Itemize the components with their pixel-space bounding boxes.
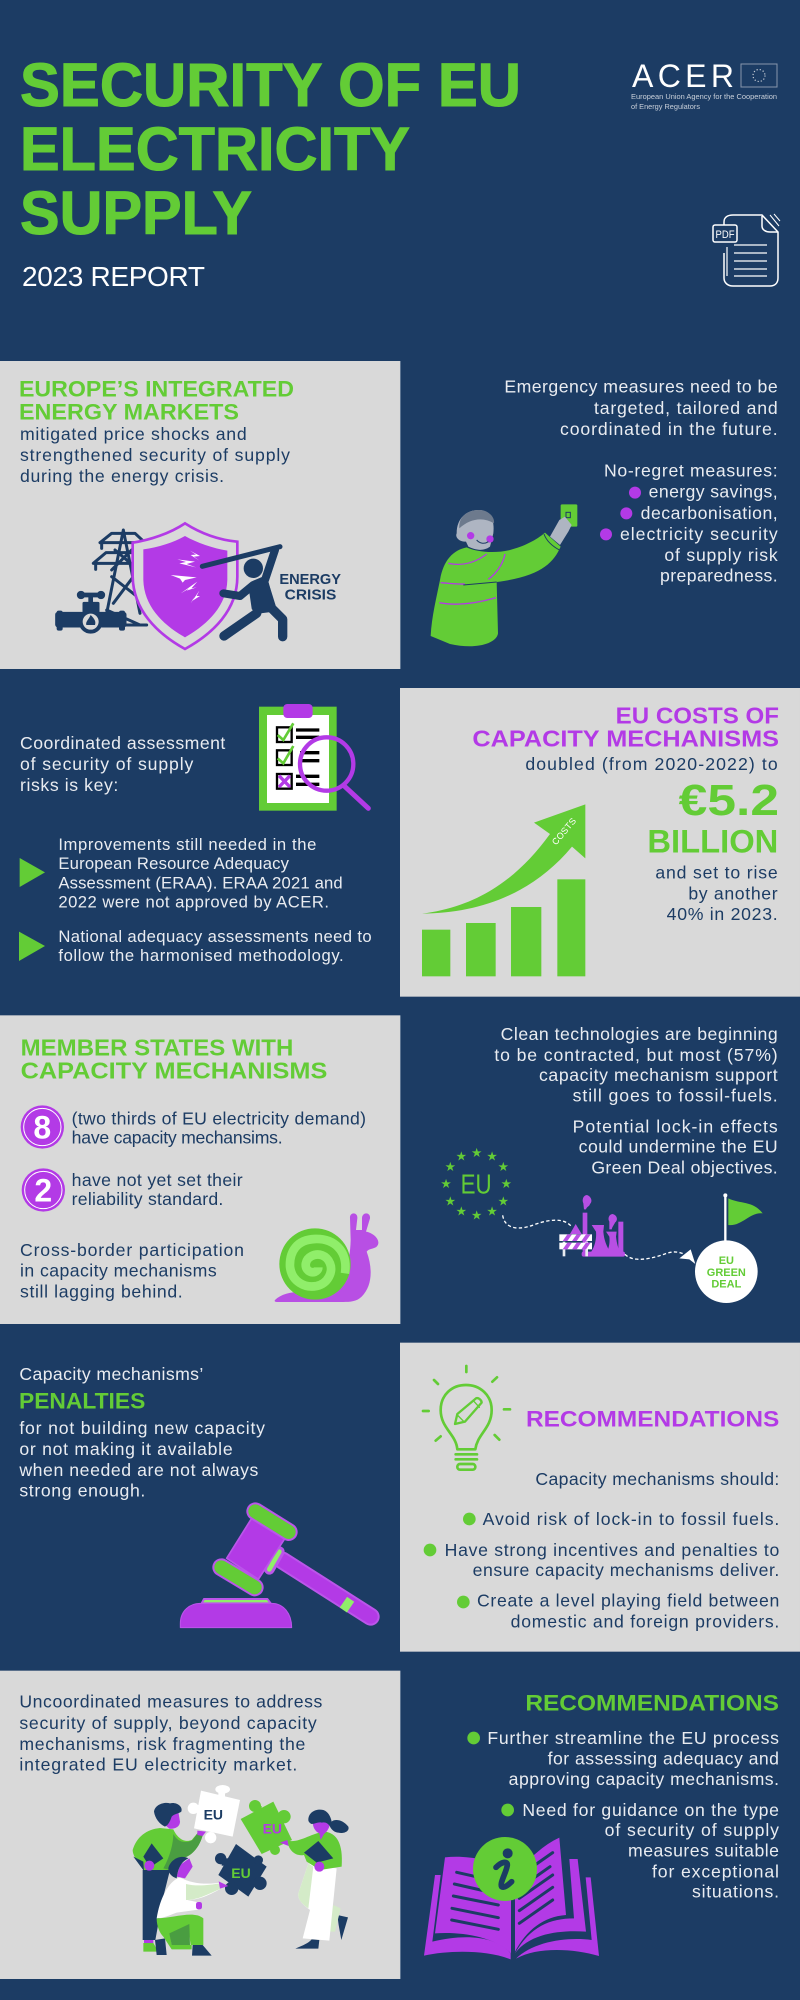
text block: mitigated price shocks and <box>20 424 247 444</box>
text block <box>655 862 778 924</box>
heading: EU COSTS OF <box>616 702 779 728</box>
heading <box>19 377 294 424</box>
text block: clean technologies: to be contracted, but most (57%) <box>494 1045 778 1065</box>
text block: clean technologies: Clean technologies are beginning <box>501 1024 778 1044</box>
text block <box>19 1692 323 1775</box>
list: recommendations: Create a level playing field between <box>477 1591 779 1611</box>
list item: streamline process: approving capacity mechanisms. <box>509 1769 779 1789</box>
heading: CAPACITY MECHANISMS <box>472 726 779 752</box>
text block: mechanisms, risk fragmenting the <box>19 1734 306 1754</box>
icon: EU stars: ★ <box>456 1204 467 1219</box>
panel: recommendations, capacity mechanisms <box>400 1343 800 1652</box>
big number <box>647 776 779 860</box>
title <box>20 51 521 247</box>
text block: cross-border: Cross-border participation <box>20 1240 244 1260</box>
text block: emergency measures <box>504 377 778 439</box>
text block: emergency measures: coordinated in the future. <box>560 419 778 439</box>
text block: when needed are not always <box>18 1460 259 1480</box>
header <box>20 51 780 292</box>
list item: guidance <box>501 1800 779 1901</box>
heading: CAPACITY MECHANISMS <box>21 1058 327 1084</box>
text block <box>20 424 290 486</box>
text block: strong enough. <box>19 1481 145 1501</box>
text block: intro: of security of supply <box>20 754 194 774</box>
text block: security of supply, beyond capacity <box>19 1713 317 1733</box>
icon: EU Green Deal flag <box>695 1193 763 1303</box>
heading: ENERGY MARKETS <box>19 399 239 424</box>
heading: RECOMMENDATIONS <box>526 1407 779 1432</box>
list item: guidance: situations. <box>692 1881 779 1901</box>
text block: strengthened security of supply <box>20 445 290 465</box>
label: energy crisis: ENERGY <box>279 572 341 588</box>
logo: ACER: ACER <box>632 58 734 94</box>
text block: clean technologies <box>494 1024 778 1106</box>
text block: Uncoordinated measures to address <box>19 1692 323 1712</box>
list: recommendations: Avoid risk of lock-in to fossil fuels. <box>483 1509 779 1529</box>
puzzle piece: navy <box>215 1844 267 1897</box>
icon: EU stars: EU <box>461 1168 492 1199</box>
label: energy crisis <box>279 572 341 603</box>
text block: 40% in 2023. <box>667 904 778 924</box>
text block: clean technologies: still goes to fossil-fuels. <box>573 1086 778 1106</box>
logo: ACER: European Union Agency for the Cooperation <box>631 92 777 101</box>
person: standing right <box>280 1810 349 1949</box>
bar chart with rising arrow: COSTS <box>550 816 578 847</box>
title: SECURITY OF EU <box>20 51 521 119</box>
icon: EU stars: ★ <box>456 1148 467 1163</box>
icon: figure attacking with club <box>202 547 283 637</box>
list item: streamline process: Further streamline the EU process <box>487 1728 779 1748</box>
icon: EU Green Deal flag: DEAL <box>711 1279 742 1291</box>
text block: lock-in effects: Green Deal objectives. <box>591 1157 778 1177</box>
text block <box>18 1418 265 1501</box>
panel: EU costs of capacity mechanisms <box>400 688 800 997</box>
text block: clean technologies: capacity mechanism support <box>539 1065 778 1085</box>
stat: 2 member states: reliability standard. <box>72 1189 223 1209</box>
puzzle piece: white: EU <box>204 1806 223 1822</box>
bullet: national adequacy assessments: National adequacy assessments need to <box>58 927 372 946</box>
title: SUPPLY <box>20 179 252 247</box>
list: recommendations: Have strong incentives and penalties to <box>445 1540 780 1560</box>
list: no-regret measures <box>600 461 778 586</box>
list item: streamline process: for assessing adequacy and <box>548 1748 779 1768</box>
title: ELECTRICITY <box>20 115 410 183</box>
list: recommendations <box>424 1509 780 1632</box>
icon: person pressing switch <box>431 504 577 646</box>
text block: for not building new capacity <box>19 1418 265 1438</box>
icon: EU stars: ★ <box>501 1176 512 1191</box>
list item: streamline process <box>467 1728 779 1789</box>
text block: intro: risks is key: <box>20 775 118 795</box>
big number: €5.2 <box>679 776 779 825</box>
bullet: national adequacy assessments: follow the harmonised methodology. <box>58 946 344 965</box>
big number: BILLION <box>647 824 778 860</box>
list: no-regret measures: of supply risk <box>664 545 778 565</box>
stat: 2 member states: 2 <box>34 1173 52 1209</box>
list item: guidance: for exceptional <box>652 1861 779 1881</box>
text block: and set to rise <box>655 862 778 882</box>
text block: lock-in effects: could undermine the EU <box>579 1137 778 1157</box>
text block: lock-in effects <box>573 1117 778 1177</box>
icon: EU Green Deal flag: GREEN <box>707 1267 746 1279</box>
icon: EU stars: ★ <box>486 1148 498 1163</box>
arrow: dashed path to factory <box>503 1215 572 1228</box>
bullet: national adequacy assessments <box>19 927 372 965</box>
panel: Europe's integrated energy markets <box>0 361 400 669</box>
text block: cross-border: still lagging behind. <box>20 1281 183 1301</box>
label: energy crisis: CRISIS <box>285 587 336 603</box>
icon: EU Green Deal flag: EU <box>719 1255 734 1267</box>
heading: PENALTIES <box>19 1388 145 1413</box>
stat: 8 member states: have capacity mechansims. <box>72 1127 283 1147</box>
panel: member states with capacity mechanisms <box>0 1015 400 1324</box>
icon: EU stars: ★ <box>471 1145 482 1160</box>
subtitle: 2023 REPORT <box>22 261 205 292</box>
panel: clean technologies <box>400 1015 778 1324</box>
bullet: ERAA improvements: 2022 were not approved by ACER. <box>58 892 329 911</box>
icon: gavel <box>180 1511 371 1628</box>
text: doubled (from 2020-2022) to <box>525 754 778 774</box>
icon: EU stars: ★ <box>445 1193 456 1208</box>
stat: 2 member states: have not yet set their <box>72 1170 243 1190</box>
icon: clipboard with magnifier <box>259 704 368 811</box>
stat: 8 member states: 8 <box>33 1109 51 1145</box>
stat: 8 member states <box>21 1105 366 1149</box>
list: recommendations: domestic and foreign providers. <box>511 1612 779 1632</box>
text: Capacity mechanisms should: <box>535 1469 779 1489</box>
heading <box>472 702 779 752</box>
icon: EU stars: ★ <box>471 1208 482 1223</box>
list item: guidance: measures suitable <box>628 1841 779 1861</box>
list: recommendations: ensure capacity mechanisms deliver. <box>473 1560 779 1580</box>
text block: cross-border: in capacity mechanisms <box>20 1261 217 1281</box>
heading: EUROPE’S INTEGRATED <box>19 377 294 402</box>
icon: PDF document: PDF <box>716 229 735 241</box>
icon: shield <box>133 523 237 649</box>
logo: ACER: of Energy Regulators <box>631 102 700 111</box>
list item: guidance: Need for guidance on the type <box>522 1800 779 1820</box>
bullet: ERAA improvements <box>20 835 343 911</box>
icon: fossil plant with barrier <box>559 1195 625 1257</box>
arrow: dashed path to green deal <box>625 1249 695 1264</box>
person: crouching <box>155 1857 228 1956</box>
text block: during the energy crisis. <box>20 466 224 486</box>
text block: lock-in effects: Potential lock-in effects <box>573 1117 778 1137</box>
panel: emergency measures <box>400 361 778 669</box>
list: no-regret measures: preparedness. <box>660 566 778 586</box>
text block: integrated EU electricity market. <box>19 1755 297 1775</box>
puzzle piece: navy: EU <box>231 1865 251 1881</box>
icon: EU stars: ★ <box>498 1193 509 1208</box>
icon: pylon and gas pipe <box>57 530 147 632</box>
bullet: ERAA improvements: Improvements still needed in the <box>58 835 316 854</box>
stat: 8 member states: (two thirds of EU electricity demand) <box>72 1108 366 1128</box>
puzzle piece: green: EU <box>263 1820 282 1836</box>
icon: snail <box>275 1213 378 1302</box>
logo: ACER <box>631 58 777 111</box>
list: no-regret measures: decarbonisation, <box>641 503 778 523</box>
text block: intro: Coordinated assessment <box>20 733 225 753</box>
puzzle piece: green <box>241 1800 292 1855</box>
heading: RECOMMENDATIONS <box>525 1691 779 1716</box>
panel: recommendations, EU process <box>400 1671 779 1979</box>
heading <box>21 1035 327 1084</box>
icon: EU stars: ★ <box>498 1159 509 1174</box>
text block: cross-border <box>20 1240 244 1301</box>
icon: PDF document <box>713 214 780 286</box>
bullet: ERAA improvements: Assessment (ERAA). ERAA 2021 and <box>58 873 343 892</box>
puzzle piece: white <box>188 1785 240 1843</box>
icon: EU stars: ★ <box>440 1176 452 1191</box>
panel: penalties <box>18 1364 371 1628</box>
text block: emergency measures: targeted, tailored and <box>594 398 778 418</box>
stat: 2 member states <box>22 1168 243 1212</box>
text block: intro <box>20 733 225 795</box>
list: no-regret measures: energy savings, <box>649 482 778 502</box>
text block: or not making it available <box>19 1439 233 1459</box>
panel: uncoordinated measures <box>0 1671 400 1979</box>
illustration: people with puzzle pieces <box>133 1785 349 1956</box>
list: no-regret measures: electricity security <box>620 524 778 544</box>
bar chart with rising arrow <box>422 804 585 976</box>
icon: EU stars <box>440 1145 512 1223</box>
icon: EU stars: ★ <box>445 1159 456 1174</box>
text block: by another <box>688 883 778 903</box>
text block: emergency measures: Emergency measures need to be <box>504 377 778 397</box>
person: standing left <box>133 1803 206 1952</box>
icon: light bulb with pencil <box>423 1366 510 1470</box>
list: no-regret measures: No-regret measures: <box>604 461 778 481</box>
icon: EU stars: ★ <box>486 1204 498 1219</box>
list item: guidance: of security of supply <box>605 1820 779 1840</box>
text: Capacity mechanisms’ <box>19 1364 203 1384</box>
heading: MEMBER STATES WITH <box>21 1035 293 1061</box>
panel: coordinated assessment <box>19 704 372 965</box>
bullet: ERAA improvements: European Resource Adequacy <box>58 854 290 873</box>
icon: open book with info mark <box>424 1837 599 1959</box>
